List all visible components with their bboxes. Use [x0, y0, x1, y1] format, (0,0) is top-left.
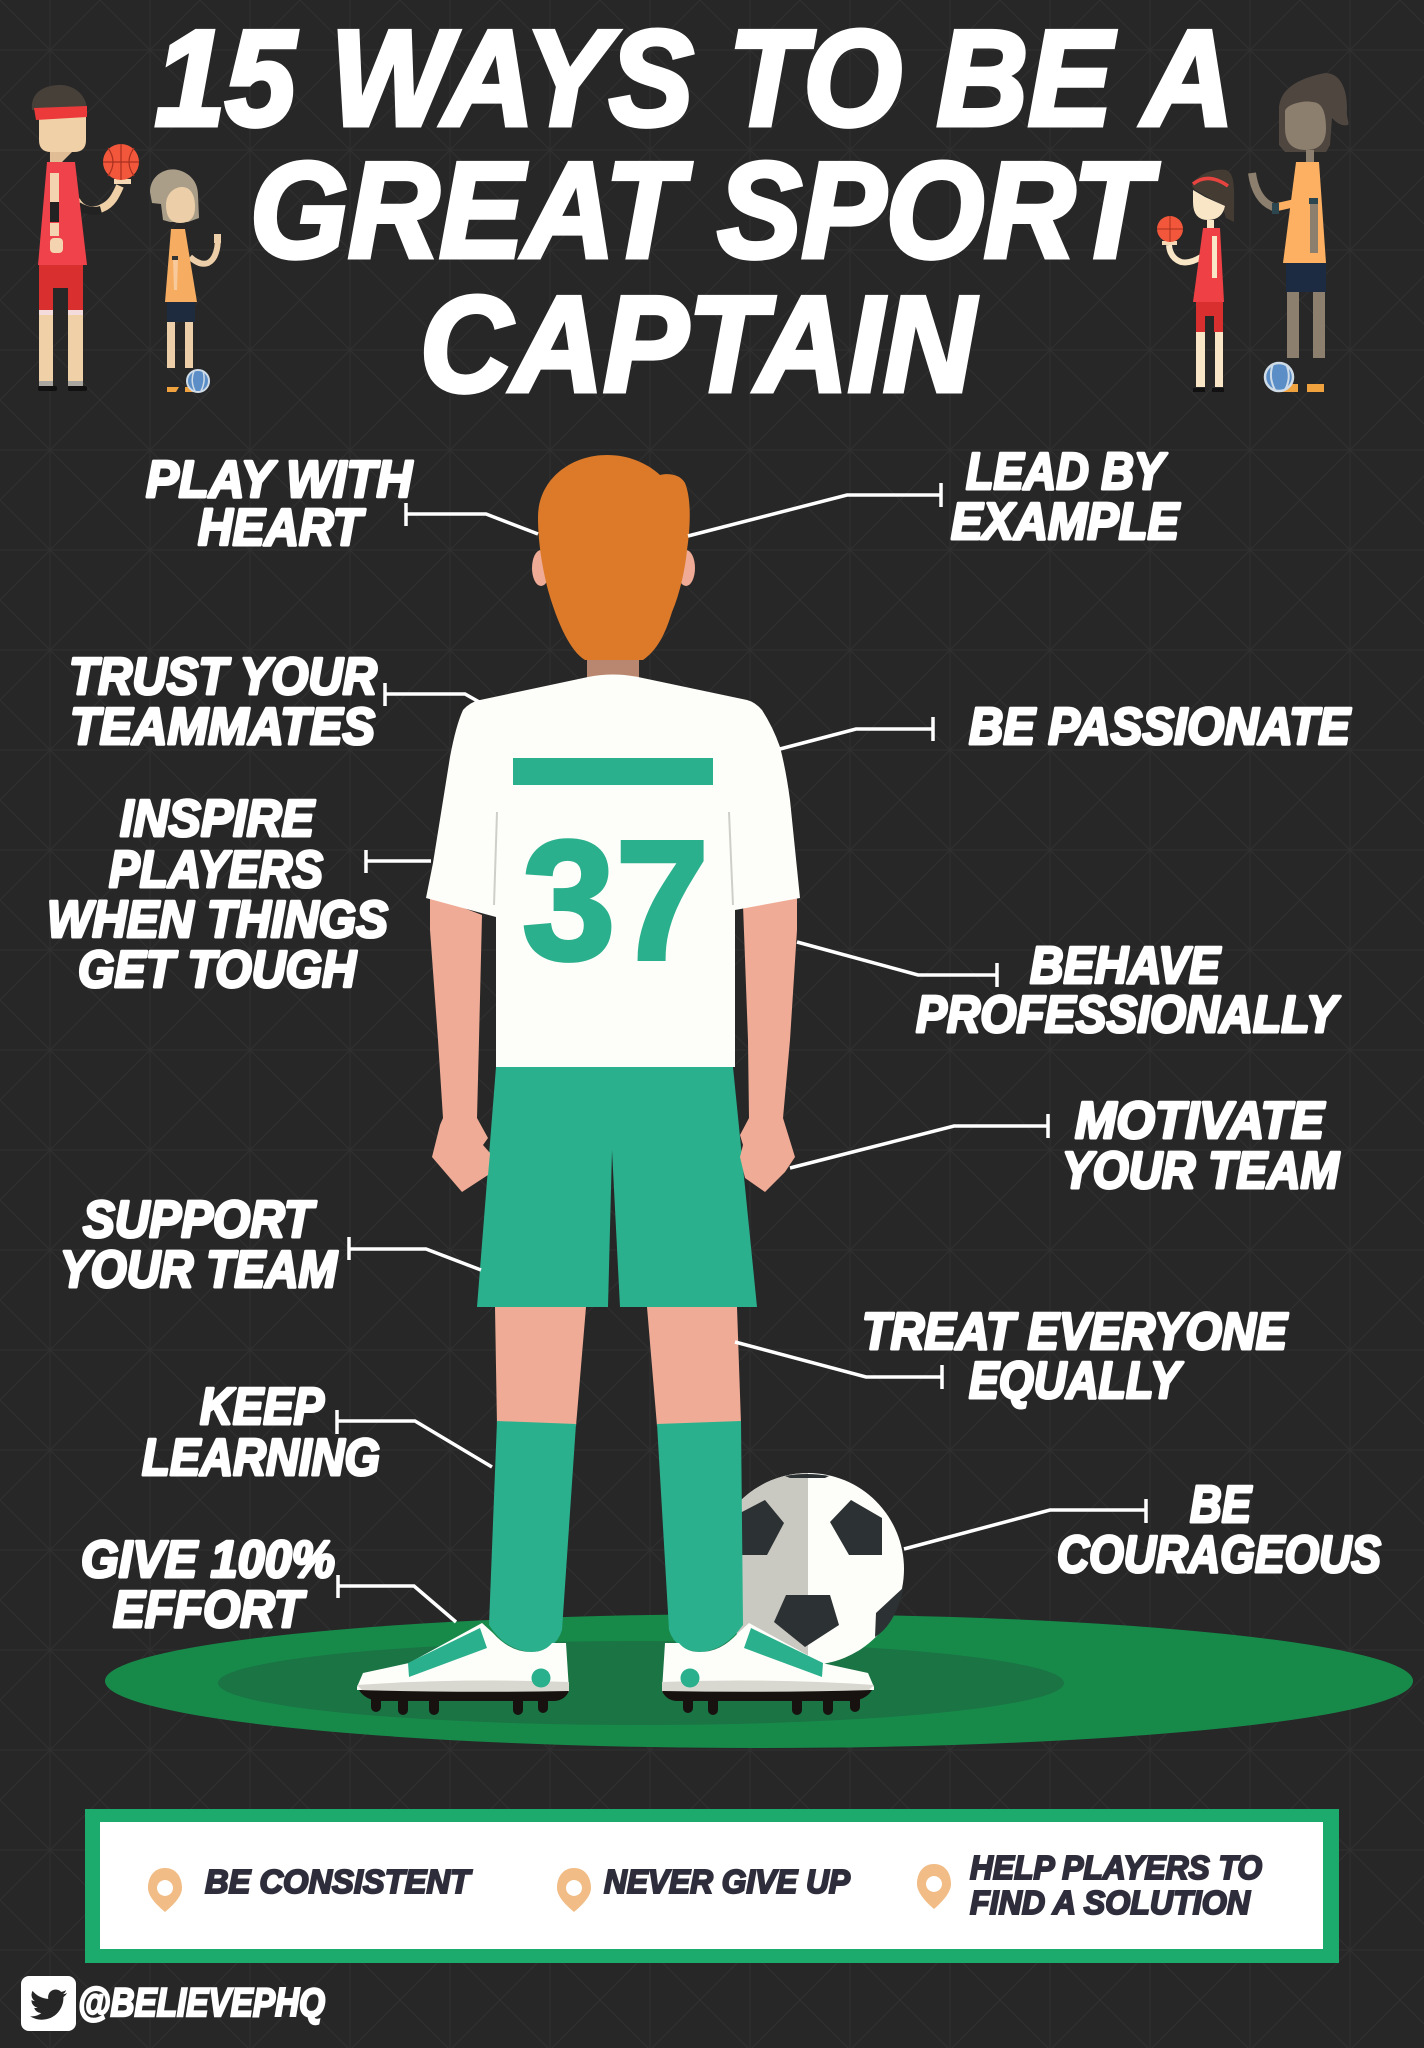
icon: twitter	[21, 1976, 76, 2031]
title	[155, 2, 1234, 420]
text: be consistent: BE CONSISTENT	[205, 1863, 473, 1900]
icon: girl basketball player	[1157, 170, 1234, 392]
label: treat everyone equally: EQUALLY	[969, 1352, 1184, 1410]
label: lead by example	[688, 443, 1180, 551]
label: inspire players when things get tough: GET TOUGH	[78, 941, 357, 999]
icon: woman player with tennis ball	[1252, 73, 1349, 392]
icon: basketball player man	[32, 85, 139, 391]
label: inspire players when things get tough: WHEN THINGS	[47, 891, 388, 949]
shirt number: 37	[522, 806, 709, 996]
ground: green pitch ellipses	[105, 1614, 1413, 1748]
footer: twitter handle	[21, 1976, 325, 2031]
icon: soccer ball	[712, 1473, 904, 1665]
label: support your team: SUPPORT	[83, 1191, 317, 1249]
title: 15 WAYS TO BE A	[155, 2, 1234, 154]
label: motivate your team: MOTIVATE	[1075, 1092, 1325, 1150]
shirt name bar	[513, 758, 713, 785]
text: never give up: NEVER GIVE UP	[604, 1863, 851, 1900]
label: play with heart: HEART	[198, 499, 366, 557]
label: keep learning: KEEP	[200, 1378, 324, 1436]
label: give 100% effort: EFFORT	[113, 1581, 307, 1639]
title: GREAT SPORT	[250, 134, 1159, 286]
label: give 100% effort	[81, 1531, 456, 1639]
icon: pin be consistent	[148, 1868, 182, 1912]
label: support your team	[60, 1191, 481, 1299]
label: behave professionally	[797, 937, 1341, 1044]
shorts	[477, 1067, 757, 1307]
label: lead by example: LEAD BY	[966, 443, 1168, 501]
title: CAPTAIN	[420, 268, 978, 420]
arms and hands	[430, 890, 797, 1192]
label: inspire players when things get tough: INSPIRE	[120, 790, 315, 848]
icon: pin never give up	[557, 1868, 591, 1912]
shoes	[357, 1623, 874, 1710]
label: motivate your team: YOUR TEAM	[1062, 1142, 1340, 1200]
sleeve creases	[494, 812, 733, 905]
socks	[489, 1421, 743, 1652]
label: treat everyone equally	[735, 1303, 1288, 1410]
label: keep learning: LEARNING	[142, 1429, 380, 1487]
label: be courageous	[904, 1476, 1381, 1584]
handle: @BELIEVEPHQ	[78, 1981, 325, 2025]
thighs	[495, 1307, 741, 1426]
icon: girl player with tennis ball	[150, 169, 221, 392]
label: play with heart	[146, 451, 538, 557]
label: trust your teammates: TRUST YOUR	[69, 648, 377, 706]
shirt	[426, 674, 800, 1067]
label: motivate your team	[790, 1092, 1340, 1200]
label: give 100% effort: GIVE 100%	[81, 1531, 335, 1589]
icon: pin help players	[917, 1864, 951, 1909]
label: behave professionally: BEHAVE	[1030, 937, 1221, 995]
label: trust your teammates	[69, 648, 481, 756]
label: behave professionally: PROFESSIONALLY	[916, 986, 1341, 1044]
ears	[532, 550, 695, 586]
label: keep learning	[142, 1378, 492, 1487]
label: lead by example: EXAMPLE	[951, 493, 1180, 551]
illustration: player seen from behind	[357, 455, 874, 1710]
panel: additional tips	[85, 1809, 1339, 1963]
text: help players to find a solution	[970, 1849, 1262, 1921]
neck	[587, 640, 639, 680]
label: treat everyone equally: TREAT EVERYONE	[862, 1303, 1288, 1361]
label: trust your teammates: TEAMMATES	[70, 698, 375, 756]
text: help players to find a solution: FIND A SOLUTION	[970, 1884, 1251, 1921]
label: be passionate	[780, 698, 1351, 756]
label: inspire players when things get tough: PLAYERS	[109, 841, 323, 899]
label: be passionate: BE PASSIONATE	[969, 698, 1351, 756]
hair	[538, 455, 690, 660]
label: inspire players when things get tough	[47, 790, 431, 999]
label: play with heart: PLAY WITH	[146, 451, 413, 509]
label: support your team: YOUR TEAM	[60, 1241, 338, 1299]
label: be courageous: BE	[1190, 1476, 1252, 1534]
text: help players to find a solution: HELP PLAYERS TO	[970, 1849, 1262, 1886]
